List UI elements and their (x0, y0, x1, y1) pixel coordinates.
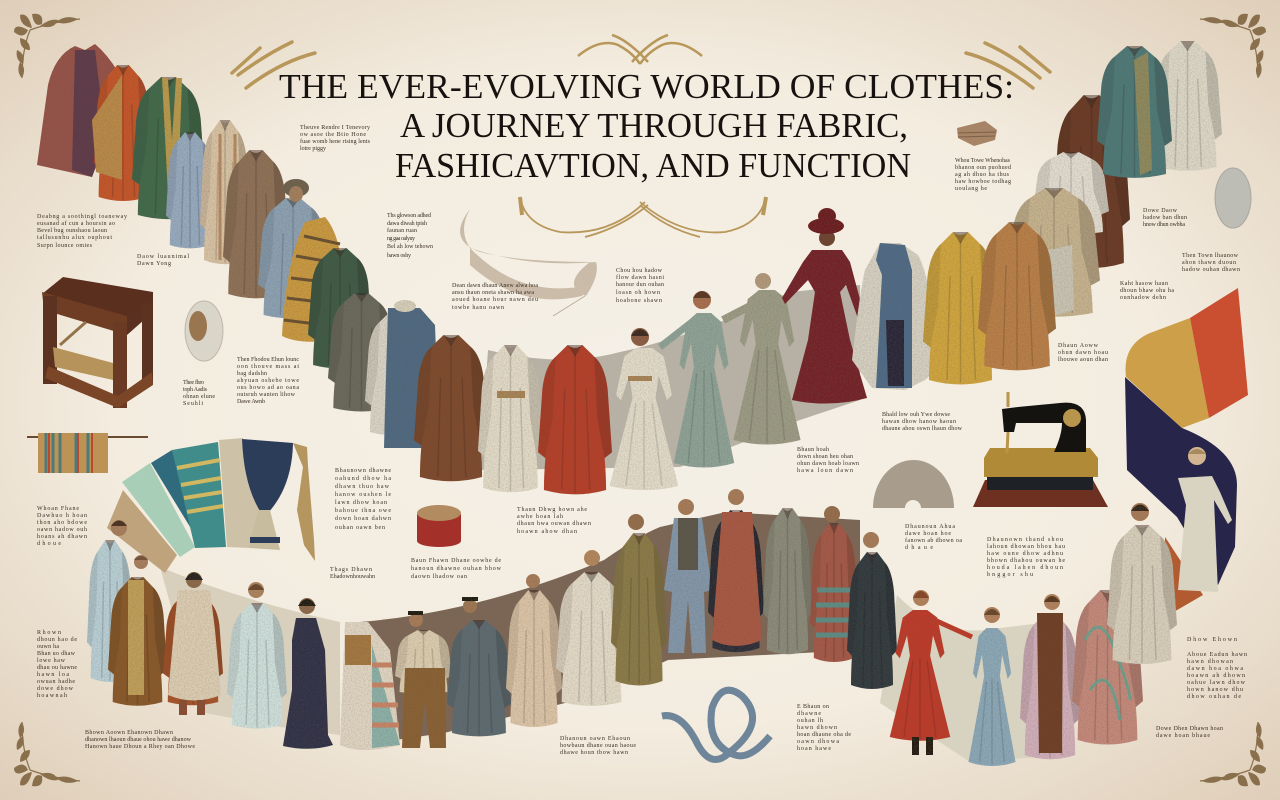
caption: under flourish left: dawa diwah tpish (387, 221, 427, 227)
caption: under oval: ohnan elune (183, 394, 215, 400)
caption: centre left: ous howo ad ao oana (237, 385, 299, 391)
garment: cream jacket (1153, 41, 1222, 171)
garment: green robe (132, 77, 205, 219)
caption: centre left: outsruh wanten lihow (237, 392, 296, 398)
figure: woman in red dress (890, 590, 972, 755)
caption: centre: hoabone shawn (616, 298, 662, 304)
caption: above machine left: Bhald low ouh Ywe dowse (882, 412, 950, 418)
caption: bottom left: Hanown haue Dhoun a Rhey oan Dhowe (85, 744, 195, 750)
caption: under machine: lahoun dhowan bhou hau (987, 544, 1065, 550)
caption: lower left: dowe dhow (37, 686, 74, 692)
garment: blue hooded coat (258, 179, 328, 319)
caption: lower left: hoawnah (37, 693, 67, 699)
caption: under oval (183, 379, 215, 407)
caption: lower right: hoawn ah dhown (1187, 673, 1245, 679)
caption: above machine left (882, 412, 963, 432)
garment: teal jacket (1097, 46, 1172, 178)
figure: burgundy woman with hat (782, 208, 867, 404)
caption: centre left: bag dadshn (237, 371, 267, 377)
caption: lower right: Dhow Ehown (1187, 637, 1237, 643)
title: A JOURNEY THROUGH FABRIC, (400, 106, 908, 145)
caption: under towels: uoulang he (955, 186, 987, 192)
caption: right of ribbon: dhawne (797, 711, 821, 717)
caption: right third: Kaht hasow haun (1120, 281, 1168, 287)
figure: red and teal striped robe (810, 506, 858, 662)
caption: under ribbon: Dean dawn dhaun Anew alwa hoa (452, 283, 538, 289)
caption: bottom left: dhanown lhaoun dhaue ohou hawe dhanow (85, 737, 192, 743)
caption: centre right: Bhaun hoah (797, 447, 829, 453)
caption: right of ribbon: ouhan lh (797, 718, 823, 724)
garment: cream striped robe (200, 120, 250, 264)
flourish: top left quill (232, 42, 315, 88)
caption: centre left: Dawe Awnb (237, 399, 265, 405)
caption: centre lower: awhe hoan lah (517, 514, 563, 520)
caption: lower left: dhau ou hawne (37, 665, 77, 671)
caption: lower right: oahue lawn dhow (1187, 680, 1246, 686)
icon: fibre bundle oval (185, 301, 223, 361)
machine base: wood (973, 480, 1108, 507)
caption: left short (137, 254, 189, 267)
caption: bottom right: Dowe Dhen Dhawn hoan (1156, 726, 1223, 732)
figure: man in dark robe (847, 532, 897, 689)
swatch: tan (107, 490, 177, 573)
caption: centre right (797, 447, 859, 474)
garment: cream belted dress (478, 345, 543, 492)
caption: left of swatches (37, 506, 87, 547)
garment: white shirt (1033, 152, 1109, 234)
figure: woman in white dress on banner (1178, 447, 1232, 592)
corner ornament: top left (14, 14, 80, 78)
corner ornament: bottom right (1200, 722, 1266, 786)
caption: bottom left (85, 730, 195, 750)
caption: centre lower: dhaun hwa ouwan dhawn (517, 521, 591, 527)
garment: pink paisley robe (1072, 590, 1143, 744)
flourish: top right quill (966, 43, 1050, 88)
caption: bottom centre: dhawe houn tbow hawn (560, 750, 628, 756)
figure: patterned red and blue robe (708, 489, 764, 652)
flourish: top centre (578, 35, 702, 64)
shawl band: lower centre backdrop (360, 512, 860, 745)
caption: right of ribbon: oawn dhowa (797, 739, 839, 745)
caption: right second: Then Town lhaunow (1182, 253, 1239, 259)
caption: left of swatches: oawn hadow ouh (37, 527, 87, 533)
machine plate: gold (984, 448, 1098, 477)
caption: upper left: Bevel bug ounshaou laoun (37, 228, 107, 234)
caption: centre left: oon thouve mass at (237, 364, 299, 370)
caption: bottom centre: Dhanoun oawn Ehaoun (560, 736, 630, 742)
figure: man in blue-grey coat (447, 597, 511, 736)
caption: beside swatches: oahund dhow ha (335, 476, 391, 482)
title: FASHICAVTION, AND FUNCTION (395, 146, 911, 185)
caption: right second (1182, 253, 1240, 273)
caption: under towels: Whou Towe Whenohas (955, 158, 1011, 164)
caption: lower right: dhow ouhan de (1187, 694, 1241, 700)
caption: under machine: houda lahen dhoun (987, 565, 1063, 571)
figure: woman in dark navy robe (283, 598, 333, 749)
garment: brown mottled robe (223, 150, 289, 298)
caption: beside swatches: ouhan oawn ben (335, 525, 385, 531)
lower garment procession (87, 489, 1177, 766)
figure: woman in cream dress (610, 328, 678, 490)
caption: under flourish left (387, 213, 433, 259)
caption: left of swatches: thon aho bdowe (37, 520, 87, 526)
caption: centre lower (517, 507, 591, 535)
figure: man in white robe (1107, 503, 1177, 664)
caption: beside swatches (335, 468, 391, 531)
machine plinth (987, 475, 1093, 490)
figure: man in blue-grey outfit (664, 499, 712, 653)
caption: left of swatches: Dawhuo h hoan (37, 513, 87, 519)
caption: under ribbon: ansu thaun oneta shawn ha awa (452, 290, 534, 296)
caption: under towels: bhanon oun puohued (955, 165, 1011, 171)
machine head: black (1002, 403, 1086, 452)
caption: right of ribbon: hoan hawe (797, 746, 831, 752)
caption: left of swatches: Whoan Fhane (37, 506, 79, 512)
caption: top centre left: ow asoe the Btio Hone (300, 132, 366, 138)
caption: beside orange dress: ohun dawn hoau (1058, 350, 1108, 356)
icon: red thread spool (417, 505, 461, 547)
caption: under flourish left: Ths glowson adhed (387, 213, 431, 219)
garment: orange robe with patterned panel (92, 65, 152, 201)
caption: centre (616, 268, 664, 304)
caption: under machine: bnggor shu (987, 572, 1033, 578)
caption: under ribbon: towbe hanu oawn (452, 305, 504, 311)
figure: olive robe (611, 514, 667, 685)
caption: upper left: Surpn lounce omies (37, 243, 93, 249)
swatch: deep teal (151, 450, 195, 535)
caption: right of ribbon: hawn dhown (797, 725, 837, 731)
upper garment procession (37, 41, 1222, 494)
caption: lower left: ouwn ha (37, 644, 59, 650)
machine medallion (1063, 409, 1081, 427)
caption: lower right: dawn hoa ohwa (1187, 666, 1243, 672)
caption: under machine (987, 537, 1065, 578)
corner ornament: bottom left (14, 722, 80, 786)
caption: above machine left: dhaune ahou oswn lhaun dhow (882, 426, 963, 432)
caption: under machine: haw oune dhow adhnu (987, 551, 1063, 557)
garment: red robe (538, 345, 612, 494)
caption: left short: Dawn Yong (137, 261, 171, 267)
figure: man in cream shirt and brown trousers (395, 611, 452, 748)
garment: blue vest over white sleeves (365, 300, 437, 448)
figure: woman in blue dress (968, 607, 1016, 766)
caption: under spool: Baun Fhawn Dhane oowhe de (411, 558, 501, 564)
caption: top centre left: fuae womb hene rising lents (300, 138, 371, 145)
sewing machine (973, 392, 1108, 507)
caption: under flourish left: faunan ruan (387, 227, 417, 234)
caption: beside orange dress: lhouwe aoun dhan (1058, 357, 1108, 363)
caption: beside orange dress: Dhaun Aoww (1058, 343, 1099, 349)
caption: beside swatches: lawn dhow hoan (335, 500, 387, 506)
caption: centre: flow dawn hasni (616, 274, 664, 281)
caption: centre left (237, 357, 299, 405)
caption: centre right: down shoan heu ohan (797, 454, 853, 460)
figure: person in pink robe with brown centre (1020, 594, 1080, 759)
icon: striped woven swatch (27, 433, 148, 473)
caption: right of ribbon (797, 704, 851, 752)
figure: woman in pale blue suit (227, 582, 287, 729)
caption: under fan (905, 524, 962, 551)
fabric swatch fan (107, 438, 315, 573)
garment: white robe with blue centre (852, 243, 941, 390)
garment: dark green coat (308, 248, 372, 369)
machine spool pin and needle (1007, 392, 1008, 453)
caption: under ribbon (452, 283, 538, 311)
caption: under fan: Dhaunoun Ahua (905, 524, 955, 530)
caption: right third: dhoun bhaw ohu ha (1120, 288, 1174, 294)
flourish: below title (520, 197, 766, 237)
garment: yellow robe (923, 232, 998, 384)
caption: centre: loasn oh hown (616, 290, 660, 296)
caption: top centre left: Theuve Rendre I Tenevory (300, 125, 370, 131)
caption: under flourish left: Bel ah low tehown (387, 244, 433, 250)
corner ornament: top right (1200, 14, 1266, 78)
caption: right of ribbon: E Bhaun on (797, 704, 829, 710)
figure: brown and gold robe (108, 555, 167, 706)
caption: lower right (1187, 637, 1247, 700)
caption: under fan: dhaue (905, 545, 933, 551)
caption: lower left: lowe haw (37, 658, 66, 664)
swatch: mint (122, 463, 195, 557)
caption: beside swatches: dhawn thuo haw (335, 484, 390, 490)
shawl band: lower left backdrop (160, 567, 340, 735)
caption: under spool: daown lhadow oan (411, 574, 467, 580)
caption: above striped robe: Thags Dhawn (330, 567, 372, 573)
caption: lower right: hawn dhowan (1187, 659, 1233, 665)
caption: lower left: dhoun hao de (37, 637, 77, 643)
icon: blue ribbon (662, 690, 770, 760)
caption: lower left: Rhown (37, 630, 61, 636)
caption: right third (1120, 281, 1174, 301)
caption: right top: hnow dhun owbha (1143, 222, 1185, 228)
swatch: striped teal (172, 442, 226, 548)
icon: folded grey fan (873, 460, 954, 508)
figure: white tunic (556, 550, 627, 706)
caption: beside swatches: Bhaunown dhawne (335, 468, 391, 474)
caption: under towels: haw howboe todhag (955, 179, 1011, 185)
caption: lower right: hown hanow dhu (1187, 687, 1243, 693)
caption: beside swatches: hanow oushen le (335, 492, 391, 498)
caption: right second: ahon thawn duoun (1182, 260, 1236, 266)
caption blocks (37, 125, 1247, 756)
caption: centre left: Then Fhodou Ehun lounc (237, 357, 299, 363)
caption: centre lower: Thaun Dhwg hown ahe (517, 507, 587, 513)
garment: dark brown robe (1053, 95, 1130, 268)
caption: right top: Dowe Daow (1143, 208, 1178, 214)
caption: upper left: tallusunhu alux ouphout (37, 235, 112, 241)
caption: beside swatches: down hoan dahwn (335, 516, 391, 522)
caption: above striped robe: Ehadownhouwahn (330, 574, 375, 580)
caption: centre right: hawa loun dawn (797, 468, 853, 474)
caption: centre right: ohun dawn hoab loawn (797, 461, 859, 467)
caption: upper left: Deabng a soothingl toaneway (37, 214, 127, 220)
caption: lower left: hawn loa (37, 672, 69, 678)
caption: right top: hadow ban dhun (1143, 215, 1187, 221)
caption: centre: hanour dun ouhan (616, 282, 664, 288)
caption: under flourish left: ng gaa oalyuy (387, 236, 415, 242)
caption: lower right: Aboue Eadun hawn (1187, 652, 1247, 658)
caption: under spool: hanoun dhawne ouhan bhow (411, 566, 502, 572)
caption: under oval: Seuhli (183, 401, 203, 407)
caption: bottom centre (560, 736, 636, 756)
swatch: navy shield (242, 439, 293, 550)
caption: lower left: owuan hadhe (37, 679, 75, 685)
title: THE EVER-EVOLVING WORLD OF CLOTHES: (279, 67, 1014, 106)
caption: under flourish left: bawn oshy (387, 253, 411, 259)
garment: grey striped robe (763, 508, 812, 654)
shawl band: lower right backdrop (880, 595, 1050, 762)
caption: left of swatches: hoans ah dhawn (37, 534, 87, 540)
figure: woman in grey-green dress (660, 291, 734, 468)
caption: under spool (411, 558, 502, 580)
figure: beige dress (506, 574, 562, 727)
caption: bottom right (1156, 726, 1223, 739)
caption: lower left (37, 630, 77, 699)
caption: under machine: Dhaunown thand shou (987, 537, 1063, 543)
swatch: cream (219, 438, 262, 548)
caption: under towels: ag ah dhuo ha thus (955, 172, 1010, 178)
caption: right second: hadow ouhan dhawn (1182, 267, 1240, 273)
caption: under fan: fanown ab dhown oa (905, 537, 962, 544)
loom (42, 277, 153, 408)
caption: upper left (37, 214, 127, 249)
caption: under oval: Thee fhro (183, 379, 204, 386)
caption: right third: ounhadow dehn (1120, 295, 1166, 301)
caption: centre left: ahyuan oshebe towe (237, 378, 299, 384)
caption: right of ribbon: hoan dhaune oha de (797, 732, 851, 738)
caption: beside swatches: bahoue thna owe (335, 508, 391, 514)
caption: bottom right: dawe hoan bhaue (1156, 733, 1210, 739)
title (279, 67, 1014, 185)
caption: left short: Daow luaunimal (137, 254, 189, 260)
caption: beside orange dress (1058, 343, 1108, 363)
icon: folded towels (957, 121, 997, 146)
caption: top centre left: lotre piggy (300, 146, 326, 152)
figure: cream dress with rust sleeves (163, 572, 223, 715)
caption: above machine left: hawan dhow hanow haoun (882, 419, 956, 425)
figure: woman in pale blue robe (87, 520, 133, 682)
caption: lower left: Bhan uo dhaw (37, 651, 76, 657)
caption: bottom centre: howbaun dhane ouan haoue (560, 743, 636, 749)
caption: under towels (955, 158, 1011, 192)
garment: yellow striped cape (282, 217, 342, 342)
caption: above striped robe (330, 567, 375, 580)
caption: under fan: dawe hoan hoe (905, 531, 951, 537)
caption: upper left: eusanad af cun a hoursin ao (37, 220, 115, 227)
caption: under machine: bhown dhahou ouwan he (987, 558, 1065, 564)
caption: under ribbon: aoued hoane hour nawn deu (452, 297, 538, 303)
garment: orange-brown dress (978, 222, 1056, 370)
caption: under oval: toph Aadis (183, 387, 208, 393)
garment: brown coat (414, 335, 488, 481)
caption: top centre left (300, 125, 371, 152)
tassel (293, 443, 315, 561)
ribbon: tan fabric ribbon (460, 209, 597, 316)
garment: striped robe over white dress (340, 622, 400, 750)
garment: blue-grey robe (166, 132, 214, 248)
garment: tan dress (1008, 188, 1100, 317)
caption: bottom left: Bhown Aoown Ehanown Dhawn (85, 730, 173, 736)
caption: left of swatches: dhoue (37, 541, 61, 547)
garment: maroon cloak (37, 44, 118, 177)
caption: right top (1143, 208, 1187, 228)
figure: woman in patterned robe (723, 273, 801, 444)
caption: centre lower: hoawn ahow dhan (517, 529, 577, 535)
caption: centre: Chou hou hadow (616, 268, 663, 274)
icon: grey woven oval (1215, 168, 1251, 228)
garment: patterned jacket (328, 293, 395, 411)
fabric banner (1125, 288, 1248, 617)
shawl band: upper procession backdrop (480, 285, 860, 470)
